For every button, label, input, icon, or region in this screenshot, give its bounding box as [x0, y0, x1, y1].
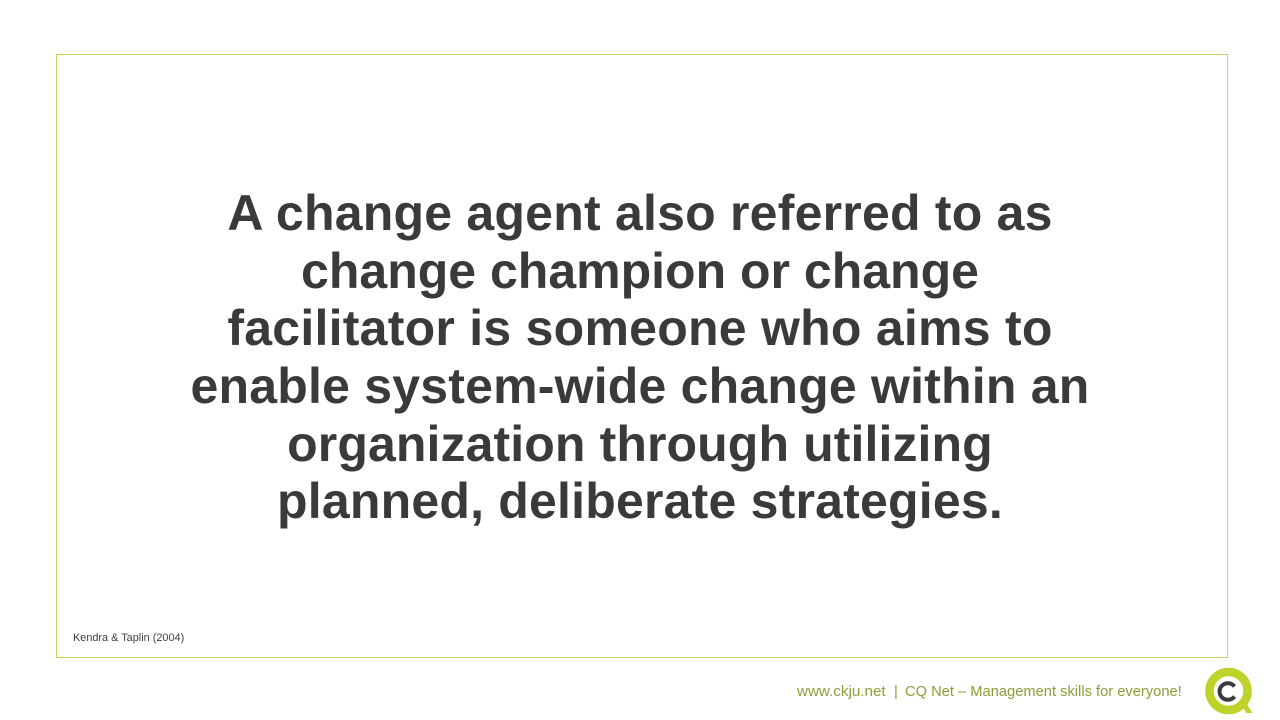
- main definition text: A change agent also referred to as: [227, 185, 1053, 241]
- main definition text: change champion or change: [301, 243, 979, 299]
- main definition text: organization through utilizing: [287, 416, 993, 472]
- footer tagline: |: [894, 684, 898, 700]
- footer tagline: CQ Net – Management skills for everyone!: [905, 684, 1182, 700]
- main definition text: facilitator is someone who aims to: [227, 300, 1053, 356]
- main definition text: planned, deliberate strategies.: [277, 473, 1003, 529]
- footer tagline: www.ckju.net: [797, 682, 886, 700]
- icon: CQ logo: [1205, 668, 1252, 714]
- main definition text: [191, 185, 1089, 529]
- citation: Kendra & Taplin (2004): [73, 632, 184, 644]
- footer tagline: [797, 682, 1182, 700]
- content frame: [56, 54, 1228, 658]
- main definition text: enable system-wide change within an: [191, 358, 1089, 414]
